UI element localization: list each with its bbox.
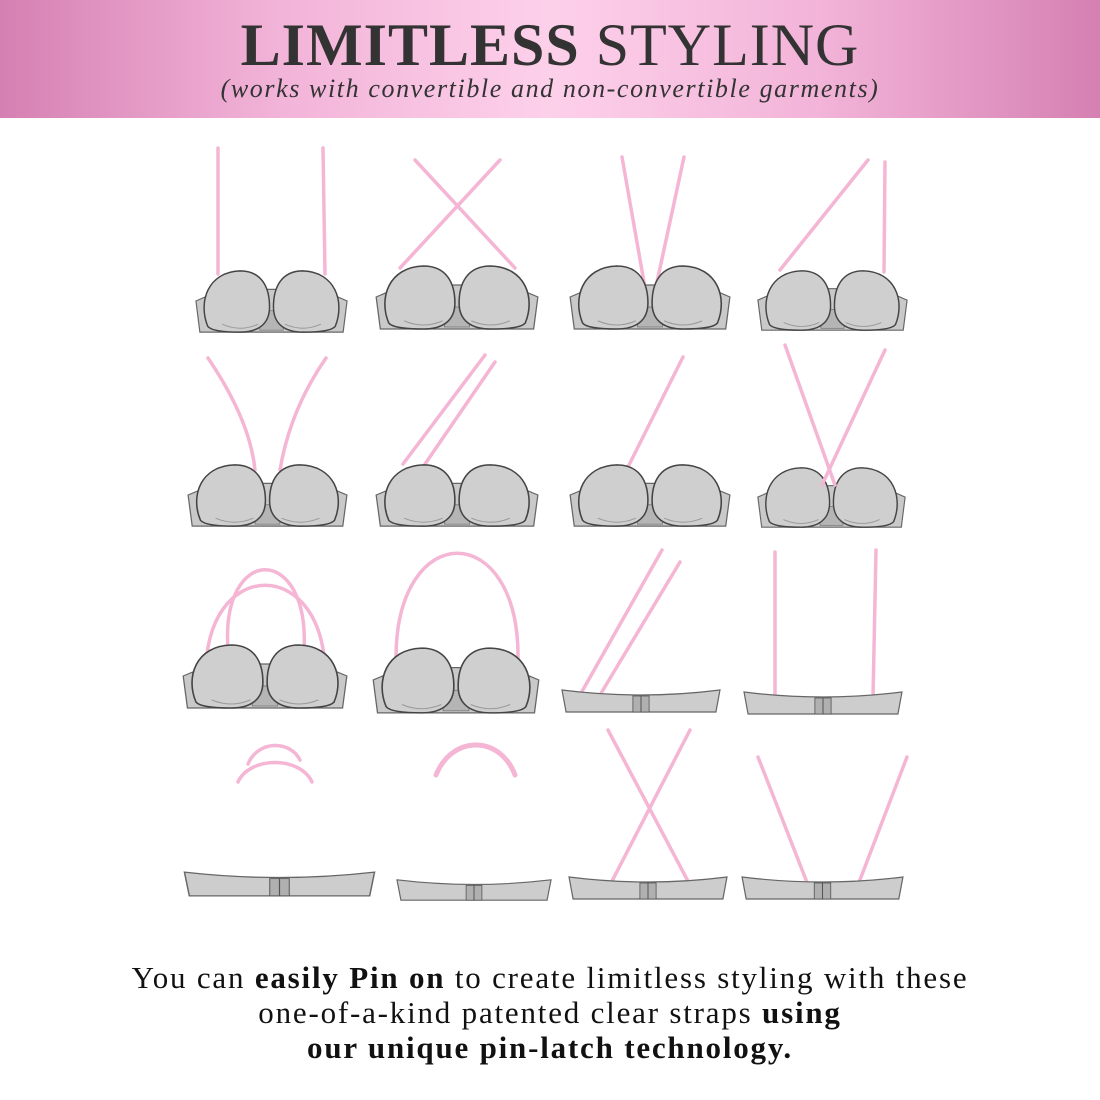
style 7: [570, 357, 730, 526]
style 9: [183, 570, 347, 708]
style 11: [562, 550, 720, 712]
style 3: [570, 157, 730, 329]
style 1: [196, 148, 347, 332]
description text: one-of-a-kind patented clear straps using: [258, 995, 842, 1030]
style 5: [188, 358, 347, 526]
description text: our unique pin-latch technology.: [307, 1030, 793, 1065]
style 13: [184, 745, 375, 896]
style 8: [758, 345, 905, 527]
description text: [132, 960, 968, 1065]
style 2: [376, 160, 538, 329]
style 14: [397, 745, 551, 900]
style 15: [569, 730, 727, 899]
style 16: [742, 757, 907, 899]
style 12: [744, 550, 902, 714]
description text: You can easily Pin on to create limitless styling with these: [132, 960, 968, 995]
title: LIMITLESS STYLING: [241, 12, 859, 78]
header banner: [0, 0, 1100, 118]
style 10: [373, 553, 539, 713]
style 6: [376, 355, 538, 526]
style 4: [758, 160, 907, 330]
subtitle: (works with convertible and non-convertible garments): [221, 74, 879, 103]
